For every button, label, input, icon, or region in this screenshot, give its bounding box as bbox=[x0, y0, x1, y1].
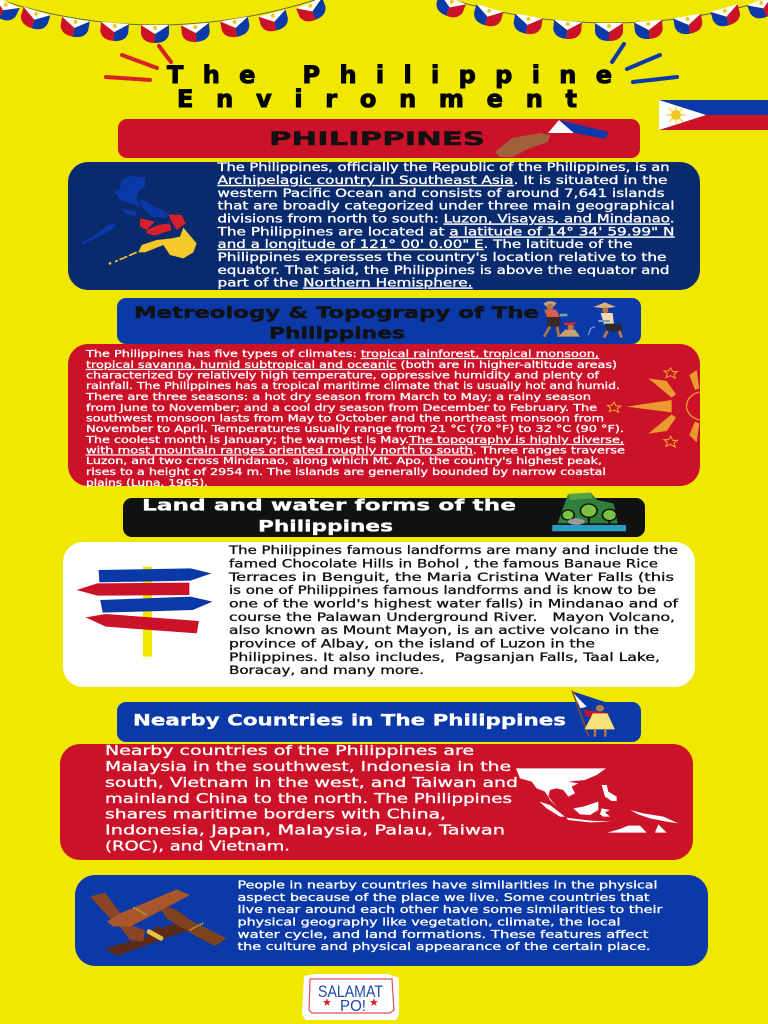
text: landforms: Boracay, and many more. bbox=[229, 663, 424, 677]
title: Environment bbox=[177, 85, 577, 113]
text: overview: that are broadly categorized under three main geographical bbox=[218, 200, 674, 212]
heading: Metreology and Topography: Philippines bbox=[269, 324, 405, 342]
text: nearby countries bbox=[105, 743, 518, 854]
text: climate: The coolest month is January; the warmest is May. The topography is highly diverse, bbox=[85, 435, 624, 446]
text: similarities: People in nearby countries have similarities in the physical bbox=[238, 880, 658, 892]
text: nearby countries: Indonesia, Japan, Malaysia, Palau, Taiwan bbox=[105, 822, 505, 838]
panel: nearby countries bbox=[60, 743, 693, 860]
text: landforms: Terraces in Benguit, the Maria Cristina Water Falls (this bbox=[228, 570, 674, 584]
icon: hand holding flag bbox=[495, 120, 609, 157]
bunting: right string of Philippine flags bbox=[433, 0, 768, 41]
text: landforms bbox=[228, 543, 679, 677]
text: landforms: course the Palawan Underground River. Mayon Volcano, bbox=[229, 610, 675, 624]
text: climate: rainfall. The Philippines has a tropical maritime climate that is usually hot and humid. bbox=[86, 381, 620, 392]
icon: Salamat Po badge: SALAMAT bbox=[318, 982, 383, 1001]
icon: blue accent rays bbox=[612, 44, 677, 82]
text: climate: There are three seasons: a hot dry season from March to May; a rainy season bbox=[85, 392, 591, 403]
text: landforms: province of Albay, on the island of Luzon in the bbox=[229, 636, 595, 650]
heading: Land and water forms: Philippines bbox=[258, 516, 393, 536]
text: nearby countries: south, Vietnam in the west, and Taiwan and bbox=[105, 775, 518, 791]
text: overview: and a longitude of 121° 00' 0.00" E . The latitude of the bbox=[218, 238, 633, 251]
title bbox=[167, 61, 612, 113]
icon: Philippine map bbox=[81, 176, 197, 265]
heading: Land and water forms: Land and water forms of the bbox=[142, 496, 516, 514]
icon: Southeast Asia map bbox=[516, 768, 678, 833]
text: climate: southwest monsoon lasts from May to October and the northeast monsoon from bbox=[86, 414, 604, 424]
text: climate: Luzon, and two cross Mindanao, along which Mt. Apo, the country's highest peak, bbox=[86, 456, 602, 467]
heading: Nearby Countries bbox=[117, 691, 641, 742]
text: landforms: also known as Mount Mayon, is an active volcano in the bbox=[229, 623, 659, 637]
icon: Salamat Po badge: ★ bbox=[322, 996, 332, 1009]
text: overview: western Pacific Ocean and consists of around 7,641 islands bbox=[218, 187, 665, 200]
heading: Metreology and Topography: Metreology & Topograpy of The bbox=[134, 303, 539, 322]
text: climate: The Philippines has five types of climates: tropical rainforest, tropical monsoon, bbox=[85, 349, 599, 360]
text: overview: Philippines expresses the country's location relative to the bbox=[218, 251, 667, 264]
text: climate: tropical savanna, humid subtropical and oceanic (both are in higher-altitude areas) bbox=[86, 360, 617, 371]
heading: Nearby Countries: Nearby Countries in The Philippines bbox=[133, 710, 566, 730]
text: landforms: is one of Philippines famous landforms and is know to be bbox=[229, 583, 656, 597]
text: landforms: The Philippines famous landforms are many and include the bbox=[228, 543, 678, 557]
text: similarities bbox=[238, 880, 663, 953]
text: climate: November to April. Temperatures usually range from 21 °C (70 °F) to 32 °C (90 °F). bbox=[86, 424, 624, 435]
icon: signpost bbox=[77, 567, 213, 657]
text: similarities: the culture and physical appearance of the certain place. bbox=[238, 941, 650, 953]
panel: landforms bbox=[63, 542, 695, 687]
panel: Philippines overview bbox=[68, 161, 700, 290]
text: landforms: one of the world's highest water falls) in Mindanao and of bbox=[229, 596, 679, 610]
heading: Land and water forms bbox=[123, 493, 645, 537]
icon: woman with flag bbox=[572, 691, 615, 737]
icon: Philippine flag bbox=[659, 100, 768, 130]
title: The Philippine bbox=[167, 61, 612, 89]
text: overview: Archipelagic country in Southeast Asia . It is situated in the bbox=[218, 174, 668, 187]
icon: red accent rays bbox=[106, 46, 171, 80]
text: nearby countries: Nearby countries of the Philippines are bbox=[105, 743, 474, 759]
text: climate: plains (Luna, 1965). bbox=[86, 478, 208, 489]
text: climate bbox=[85, 349, 625, 489]
heading: Philippines bbox=[118, 119, 640, 158]
text: climate: rises to a height of 2954 m. The islands are generally bounded by narrow coastal bbox=[86, 467, 606, 478]
text: nearby countries: (ROC), and Vietnam. bbox=[105, 838, 290, 854]
text: nearby countries: mainland China to the north. The Philippines bbox=[105, 791, 512, 807]
text: similarities: live near around each other have some similarities to their bbox=[238, 904, 663, 916]
text: landforms: famed Chocolate Hills in Bohol , the famous Banaue Rice bbox=[229, 556, 658, 570]
heading: Philippines: PHILIPPINES bbox=[269, 128, 485, 150]
text: overview: part of the Northern Hemisphere. bbox=[218, 276, 472, 290]
text: similarities: physical geography like vegetation, climate, the local bbox=[238, 916, 620, 928]
icon: Salamat Po badge bbox=[302, 974, 399, 1020]
text: climate: characterized by relatively high temperature, oppressive humidity and plenty of bbox=[86, 370, 600, 382]
text: nearby countries: Malaysia in the southwest, Indonesia in the bbox=[105, 759, 511, 775]
text: overview: The Philippines are located at a latitude of 14° 34' 59.99" N bbox=[216, 226, 674, 238]
text: climate: with most mountain ranges oriented roughly north to south . Three ranges traverse bbox=[86, 446, 625, 456]
bunting: left string of Philippine flags bbox=[0, 0, 329, 43]
text: similarities: aspect because of the place we live. Some countries that bbox=[238, 892, 650, 904]
panel: similarities bbox=[75, 875, 708, 966]
icon: joined hands bbox=[90, 889, 227, 956]
text: overview bbox=[216, 161, 674, 290]
text: overview: The Philippines, officially the Republic of the Philippines, is an bbox=[216, 161, 670, 174]
text: overview: equator. That said, the Philippines is above the equator and bbox=[218, 264, 670, 277]
text: overview: divisions from north to south: Luzon, Visayas, and Mindanao . bbox=[218, 212, 674, 226]
icon: farmers bbox=[543, 301, 623, 338]
icon: Salamat Po badge: ★ bbox=[369, 996, 379, 1009]
icon: sun and stars bbox=[607, 368, 700, 447]
text: nearby countries: shares maritime borders with China, bbox=[105, 806, 446, 822]
text: climate: from June to November; and a cool dry season from December to February. The bbox=[86, 403, 597, 414]
heading: Metreology and Topography bbox=[117, 298, 641, 344]
text: landforms: Philippines. It also includes, Pagsanjan Falls, Taal Lake, bbox=[229, 650, 660, 664]
text: similarities: water cycle, and land formations. These features affect bbox=[238, 929, 648, 941]
icon: landform bbox=[552, 493, 626, 531]
icon: Salamat Po badge: PO! bbox=[340, 998, 366, 1015]
panel: climate and topography bbox=[68, 344, 700, 489]
